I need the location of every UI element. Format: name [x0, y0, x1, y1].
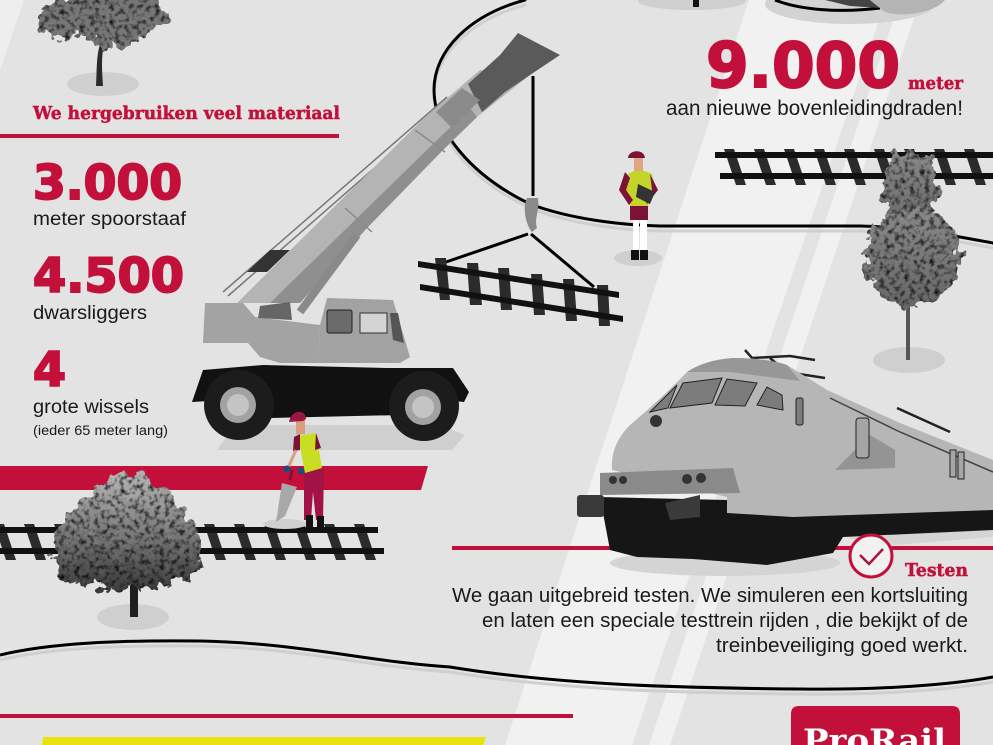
- top fragment: cable reel: [765, 0, 945, 24]
- stat: 4.500 sleepers: dwarsliggers: [33, 303, 147, 324]
- logo: ProRail: [791, 706, 960, 745]
- crane rear body: [203, 303, 320, 363]
- wire curve: lower route: [0, 641, 993, 694]
- paragraph: testing: treinbeveiliging goed werkt.: [716, 635, 968, 657]
- red band: [0, 466, 428, 490]
- train locomotive: [577, 350, 993, 576]
- crane boom: [237, 33, 560, 312]
- train undercarriage: [600, 497, 993, 565]
- crane chassis: [192, 365, 469, 418]
- top fragment: figure shadow and boots: [638, 0, 746, 10]
- stat: 3.000 rails: 3.000: [33, 156, 182, 211]
- icon: check mark: [850, 535, 892, 577]
- paragraph: testing: [452, 585, 968, 657]
- worker with clipboard: [614, 151, 662, 266]
- stat: 4 switches: (ieder 65 meter lang): [33, 423, 168, 438]
- stat: 4 switches: grote wissels: [33, 397, 149, 418]
- heading: Testen: Testen: [905, 560, 968, 581]
- crane cab: [318, 298, 410, 363]
- stat: 4.500 sleepers: 4.500: [33, 249, 184, 304]
- train windows: [650, 378, 964, 479]
- worker with jackhammer: [263, 412, 324, 529]
- paragraph: testing: en laten een speciale testtrein rijden , die bekijkt of de: [482, 610, 968, 632]
- stat: 9.000 meter: 9.000: [706, 29, 900, 102]
- paragraph: testing: We gaan uitgebreid testen. We simuleren een kortsluiting: [452, 585, 968, 607]
- crane wheels: [204, 370, 459, 441]
- train bumpers: [577, 495, 700, 520]
- track: upper right: [715, 149, 993, 185]
- train pantograph: [745, 350, 950, 432]
- yellow banner: [42, 737, 486, 745]
- crane carrying rail track: [192, 33, 623, 450]
- stat: 9.000 meter: meter: [908, 73, 963, 94]
- tree: top left: [40, 0, 166, 96]
- hanging rail track: [418, 258, 623, 326]
- wire curve: upper route: [434, 0, 993, 248]
- heading: material reuse: We hergebruiken veel materiaal: [32, 103, 340, 124]
- stat: 9.000 meter: aan nieuwe bovenleidingdraden!: [666, 97, 963, 120]
- tree: lower left: [52, 472, 202, 630]
- crane ground shadow: [217, 425, 465, 450]
- train headlights: [609, 415, 706, 484]
- section rule: Testen: [452, 546, 993, 550]
- train body: [612, 358, 993, 517]
- stat: 3.000 rails: meter spoorstaaf: [33, 209, 187, 230]
- crane cables: [223, 97, 450, 296]
- bottom rule: [0, 714, 573, 718]
- tree: right: [864, 150, 960, 373]
- crane hook and rope: [446, 76, 594, 287]
- stat: 4 switches: 4: [33, 343, 66, 398]
- train shadow: [610, 524, 993, 576]
- crane outriggers: [247, 250, 343, 272]
- stat: 9.000 meter: [666, 29, 963, 120]
- stat: 4 switches: [33, 343, 168, 438]
- train buffer beam: [600, 468, 740, 495]
- track: lower left: [0, 524, 384, 560]
